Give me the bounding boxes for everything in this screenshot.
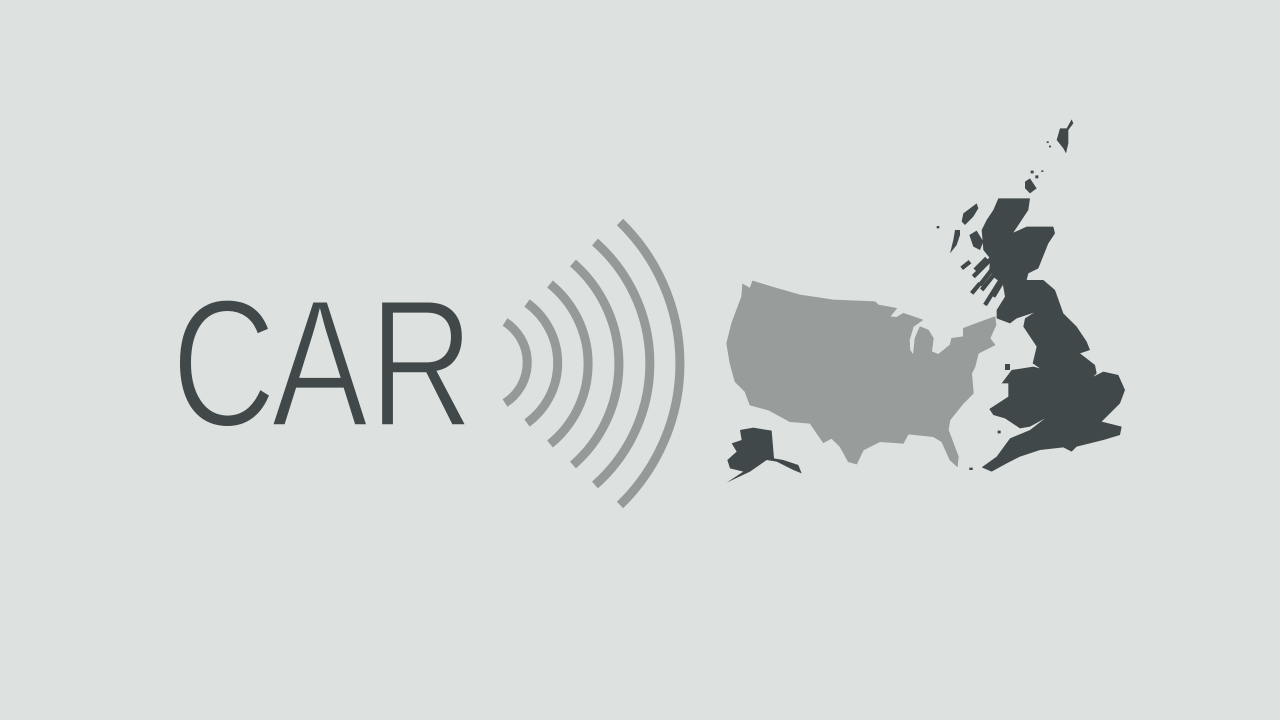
map: Anglesey and small islands xyxy=(937,141,1051,470)
wave 4 xyxy=(573,263,619,465)
wave 3 xyxy=(550,284,588,444)
map: contiguous states xyxy=(727,281,996,467)
wave 6 xyxy=(620,222,680,505)
map: United Kingdom xyxy=(937,119,1125,472)
map: United States xyxy=(727,281,996,483)
wave 1 xyxy=(505,322,527,403)
title: CAR wordmark: CAR xyxy=(171,261,474,465)
map: Alaska xyxy=(727,428,802,483)
wave 2 xyxy=(527,303,558,423)
map: west coast inlets and islets xyxy=(962,258,1003,305)
icon: signal waves xyxy=(505,222,680,505)
map: Great Britain xyxy=(982,198,1125,472)
map: Scottish islands xyxy=(950,119,1073,253)
wave 5 xyxy=(595,242,650,485)
